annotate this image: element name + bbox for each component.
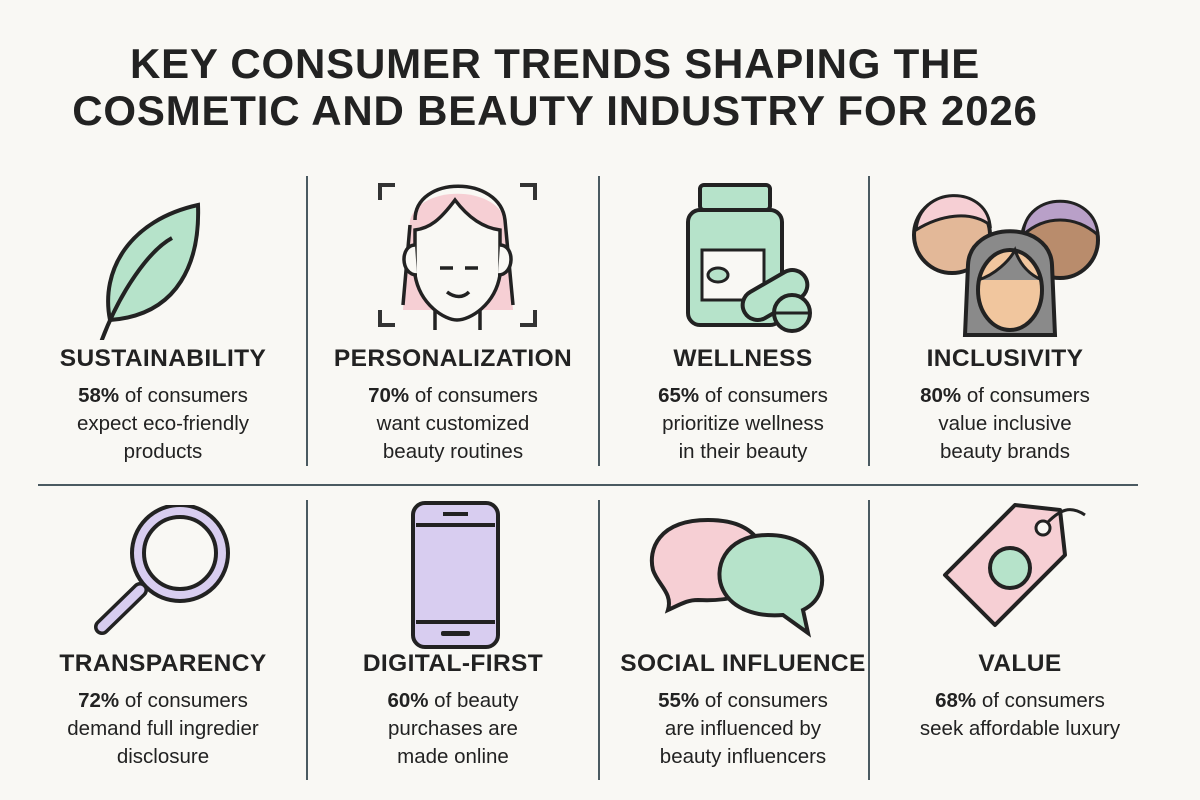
icon: price tag — [942, 503, 1086, 628]
cell: transparency: disclosure — [117, 745, 209, 768]
cell: digital-first: purchases are — [388, 717, 518, 740]
cell: transparency: TRANSPARENCY — [59, 650, 267, 677]
cell: inclusivity: 80% of consumers — [920, 384, 1090, 407]
cell: digital-first: DIGITAL-FIRST — [363, 650, 543, 677]
cell: social influence: beauty influencers — [660, 745, 826, 768]
cell: wellness: in their beauty — [679, 440, 807, 463]
cell: personalization: want customized — [377, 412, 529, 435]
cell: personalization: PERSONALIZATION — [334, 345, 572, 372]
cell: inclusivity — [920, 345, 1090, 463]
cell: personalization: beauty routines — [383, 440, 523, 463]
cell: transparency: demand full ingredier — [67, 717, 259, 740]
cell: inclusivity: INCLUSIVITY — [927, 345, 1083, 372]
icon: magnifier — [94, 505, 230, 635]
cell: sustainability: SUSTAINABILITY — [60, 345, 266, 372]
cell: social influence: 55% of consumers — [658, 689, 828, 712]
cell: sustainability — [60, 345, 266, 463]
cell: personalization: 70% of consumers — [368, 384, 538, 407]
cell: inclusivity: beauty brands — [940, 440, 1070, 463]
cell: value: seek affordable luxury — [920, 717, 1120, 740]
cell: social influence: are influenced by — [665, 717, 821, 740]
cell: value — [920, 650, 1120, 740]
icon: face — [378, 183, 537, 330]
cell: digital-first: made online — [397, 745, 509, 768]
title — [72, 40, 1038, 134]
cell: sustainability: products — [124, 440, 202, 463]
cell: personalization — [334, 345, 572, 463]
icon: leaf — [100, 202, 200, 340]
cell: wellness: WELLNESS — [673, 345, 813, 372]
cell: value: 68% of consumers — [935, 689, 1105, 712]
title: COSMETIC AND BEAUTY INDUSTRY FOR 2026 — [72, 87, 1038, 134]
cell: transparency: 72% of consumers — [78, 689, 248, 712]
cell: sustainability: expect eco-friendly — [77, 412, 249, 435]
icon: phone — [411, 501, 500, 649]
cell: value: VALUE — [978, 650, 1062, 677]
cell: social influence — [620, 650, 866, 768]
cell: wellness: prioritize wellness — [662, 412, 824, 435]
cell: digital-first: 60% of beauty — [387, 689, 519, 712]
cell: transparency — [59, 650, 267, 768]
icon: diverse faces — [912, 194, 1100, 337]
cell: sustainability: 58% of consumers — [78, 384, 248, 407]
cell: social influence: SOCIAL INFLUENCE — [620, 650, 866, 677]
cell: digital-first — [363, 650, 543, 768]
cell: wellness — [658, 345, 828, 463]
cell: wellness: 65% of consumers — [658, 384, 828, 407]
icon: bottle and pills — [686, 183, 812, 333]
cell: inclusivity: value inclusive — [938, 412, 1072, 435]
icon: speech bubbles — [650, 518, 824, 638]
title: KEY CONSUMER TRENDS SHAPING THE — [130, 40, 980, 87]
